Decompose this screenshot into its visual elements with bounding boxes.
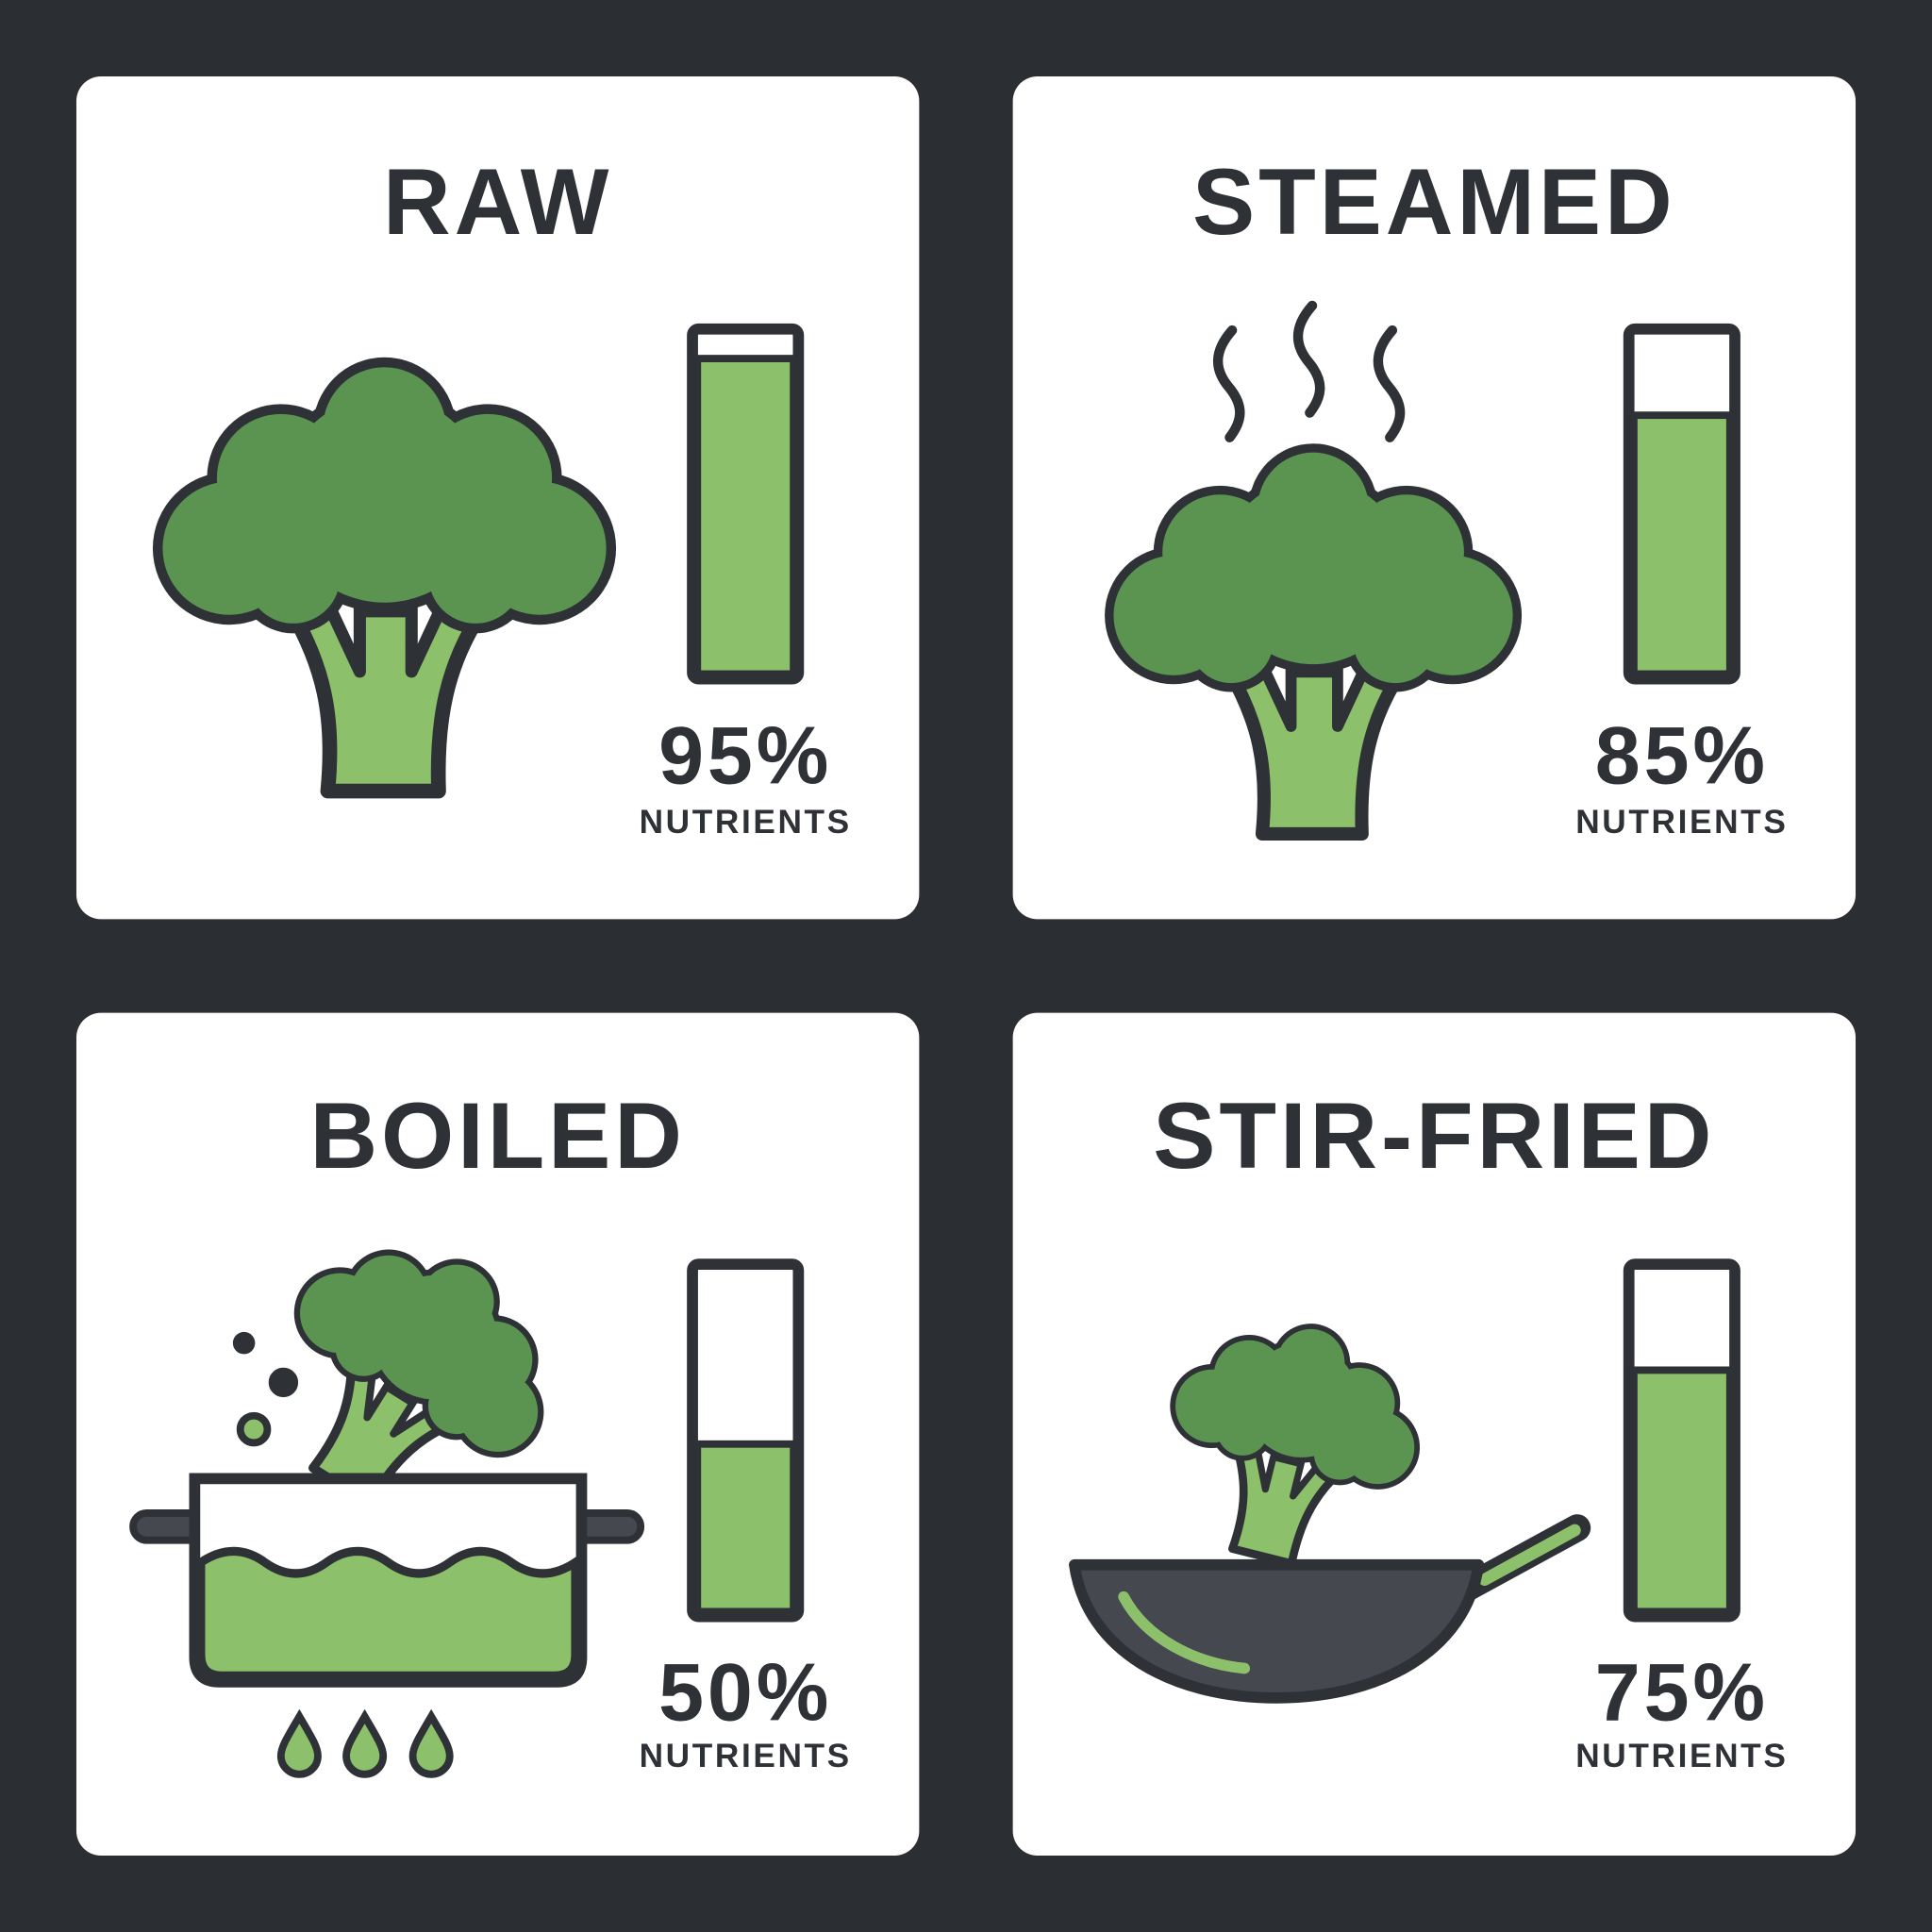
icon: broccoli steamed [1105, 443, 1522, 834]
bar: boiled 50% [692, 1264, 798, 1617]
value: stir-fried: NUTRIENTS [1575, 1738, 1788, 1774]
value: steamed [1575, 711, 1788, 841]
heading: steamed: STEAMED [1192, 150, 1676, 255]
value: boiled [640, 1647, 852, 1774]
icon: steam [1218, 306, 1400, 438]
bar: steamed 85% [1629, 329, 1735, 679]
value: steamed: 85% [1595, 711, 1769, 802]
bar: stir-fried 75% [1629, 1264, 1735, 1617]
icon: broccoli raw [153, 358, 616, 791]
panel: stir-fried [1013, 1013, 1856, 1856]
bar: raw 95% [692, 329, 798, 679]
heading: stir-fried: STIR-FRIED [1153, 1084, 1715, 1189]
value: steamed: NUTRIENTS [1575, 804, 1788, 841]
value: raw: NUTRIENTS [640, 804, 852, 841]
heading: boiled: BOILED [309, 1084, 686, 1189]
value: boiled: 50% [658, 1647, 832, 1738]
panel: raw [76, 76, 919, 919]
panel: boiled [76, 1013, 919, 1856]
icon: broccoli stir-fried [1139, 1294, 1444, 1587]
value: raw: 95% [658, 711, 832, 802]
value: boiled: NUTRIENTS [640, 1738, 852, 1774]
icon: bubbles [237, 1336, 294, 1442]
heading: raw: RAW [383, 150, 612, 255]
value: raw [640, 711, 852, 841]
value: stir-fried: 75% [1595, 1647, 1769, 1738]
icon: wok [1074, 1528, 1577, 1698]
icon: broccoli boiled [224, 1191, 597, 1559]
icon: drops [281, 1716, 450, 1774]
icon: pot [133, 1478, 641, 1682]
panel: steamed [1013, 76, 1856, 919]
value: stir-fried [1575, 1647, 1788, 1774]
